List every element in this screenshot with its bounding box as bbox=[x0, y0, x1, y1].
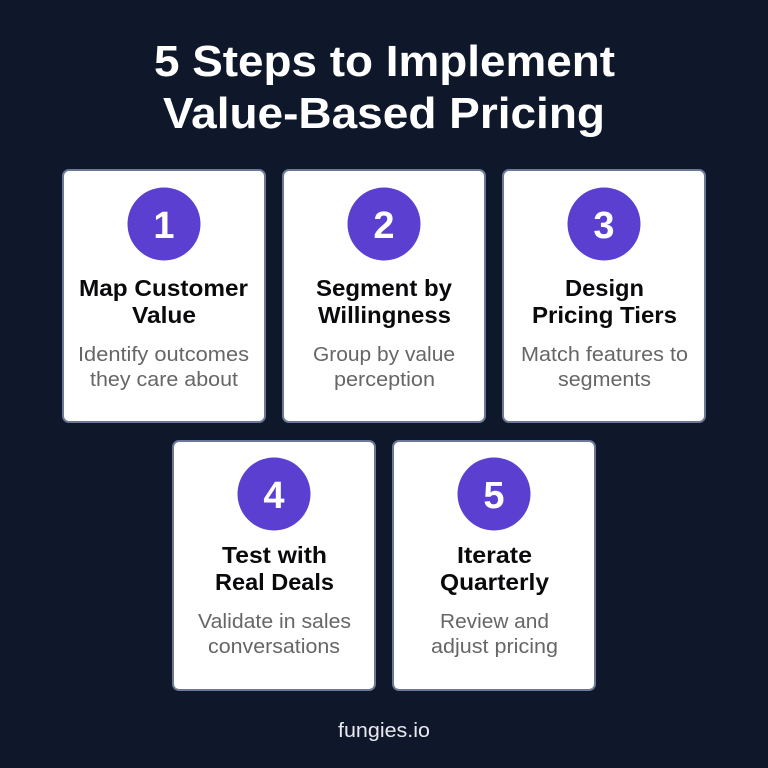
text: step 3 description: segments bbox=[558, 369, 651, 391]
text: step 2 description bbox=[313, 344, 455, 391]
heading: step 3: Pricing Tiers bbox=[532, 302, 677, 328]
title: Value-Based Pricing bbox=[163, 89, 605, 138]
panel: step 3 bbox=[503, 170, 705, 422]
text: step 5 description: adjust pricing bbox=[431, 636, 558, 658]
panel: step 5 bbox=[393, 441, 595, 690]
icon: number 3 badge: 3 bbox=[593, 205, 615, 247]
heading: step 3 bbox=[532, 275, 677, 328]
icon: number 2 badge: 2 bbox=[373, 205, 395, 247]
text: step 2 description: perception bbox=[334, 369, 435, 391]
heading: step 3: Design bbox=[565, 275, 644, 301]
text: step 2 description: Group by value bbox=[313, 344, 455, 366]
icon: number 5 badge bbox=[458, 458, 530, 530]
icon: number 3 badge bbox=[568, 188, 640, 260]
panel: step 4 bbox=[173, 441, 375, 690]
heading: step 2: Segment by bbox=[316, 275, 452, 301]
text: step 1 description bbox=[78, 344, 249, 391]
text: step 4 description bbox=[198, 611, 351, 658]
heading: step 1 bbox=[79, 275, 248, 328]
heading: step 1: Value bbox=[132, 302, 196, 328]
heading: step 5: Iterate bbox=[457, 542, 532, 568]
panel: step 2 bbox=[283, 170, 485, 422]
text: step 3 description bbox=[521, 344, 688, 391]
title: 5 Steps to Implement bbox=[154, 37, 615, 86]
text: step 4 description: Validate in sales bbox=[198, 611, 351, 633]
heading: step 2 bbox=[316, 275, 452, 328]
icon: number 5 badge: 5 bbox=[483, 475, 505, 517]
icon: number 1 badge bbox=[128, 188, 200, 260]
text: step 5 description bbox=[431, 611, 558, 658]
icon: number 4 badge bbox=[238, 458, 310, 530]
title bbox=[154, 37, 615, 138]
heading: step 4: Test with bbox=[222, 542, 327, 568]
heading: step 1: Map Customer bbox=[79, 275, 248, 301]
text: step 5 description: Review and bbox=[440, 611, 549, 633]
heading: step 5 bbox=[440, 542, 549, 595]
text: step 1 description: they care about bbox=[90, 369, 238, 391]
text: step 4 description: conversations bbox=[208, 636, 340, 658]
heading: step 4: Real Deals bbox=[215, 569, 334, 595]
text: step 3 description: Match features to bbox=[521, 344, 688, 366]
panel: step 1 bbox=[63, 170, 265, 422]
heading: step 4 bbox=[215, 542, 334, 595]
icon: number 1 badge: 1 bbox=[153, 205, 175, 247]
heading: step 5: Quarterly bbox=[440, 569, 549, 595]
footer: brand: fungies.io bbox=[338, 720, 430, 742]
heading: step 2: Willingness bbox=[318, 302, 451, 328]
text: step 1 description: Identify outcomes bbox=[78, 344, 249, 366]
icon: number 4 badge: 4 bbox=[263, 475, 285, 517]
icon: number 2 badge bbox=[348, 188, 420, 260]
